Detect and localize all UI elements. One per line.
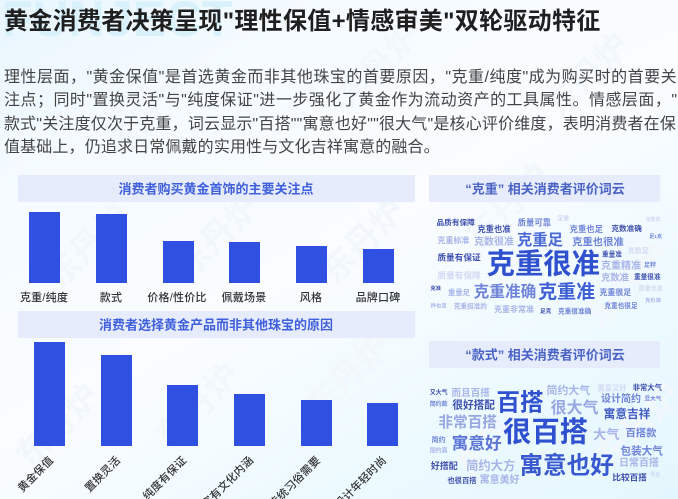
text: 东丹炉 [149, 357, 248, 456]
word cloud: style: 寓意美好 [480, 473, 520, 486]
text: 东丹炉 [39, 197, 138, 296]
word cloud: weight: 克数准 [601, 272, 630, 283]
word cloud: style: 简约大气 [546, 383, 590, 397]
word cloud: style: 寓意也好 [519, 451, 614, 479]
word cloud: style: 简约高 [430, 446, 448, 454]
word cloud: weight: 克重足 [517, 231, 563, 249]
panel: weight word cloud [429, 175, 663, 315]
word cloud: style: 很好搭配 [452, 398, 495, 411]
word cloud: style: 简约 [432, 435, 446, 444]
panel: main concerns bar chart [18, 175, 415, 304]
axis labels: main concerns: 佩戴场景 [222, 290, 266, 304]
axis labels: main concerns: 风格 [300, 290, 322, 304]
word cloud: style: 包装大气 [620, 444, 663, 457]
word cloud: style: 寓意又好 [597, 383, 627, 392]
word cloud: weight: 重量准 [602, 249, 622, 258]
text block: summary [4, 68, 678, 156]
word cloud: weight: 克重很准 [487, 249, 600, 281]
word cloud: weight: 克数准 [646, 216, 660, 223]
bar chart: main concerns [29, 212, 394, 283]
word cloud: weight: 秤也足 [431, 302, 447, 310]
text block: summary: 理性层面，"黄金保值"是首选黄金而非其他珠宝的首要原因，"克重/纯度"成为购买时的首要关 [4, 69, 677, 86]
word cloud: weight: 克价准 [645, 296, 662, 304]
word cloud: style: 大气 [593, 426, 620, 442]
word cloud: weight: 质量有保证 [437, 252, 481, 263]
text: 东丹炉 [9, 377, 108, 476]
word cloud: style: 寓意好 [452, 433, 502, 453]
text: 东丹炉 [459, 157, 558, 256]
word cloud: style [430, 383, 663, 486]
word cloud: weight: 克重也准 [477, 224, 511, 234]
word cloud: weight: 足1克 [649, 233, 662, 240]
word cloud: weight: 质量可靠 [518, 218, 551, 228]
word cloud: weight: 克重也很准 [572, 235, 624, 248]
word cloud: style: 日常百搭 [619, 456, 659, 469]
axis labels: main concerns: 价格/性价比 [147, 290, 207, 304]
word cloud: style: 百搭 [496, 389, 544, 416]
word cloud: style: 很且 [650, 471, 660, 478]
word cloud: style: 又大气 [430, 389, 448, 397]
word cloud: weight: 克重非常准 [494, 304, 534, 314]
axis labels: main concerns: 品牌口碑 [356, 290, 400, 304]
text: 东丹炉 [539, 27, 638, 126]
word cloud: weight: 克重挺准的 [454, 301, 487, 310]
text: 东丹炉 [314, 192, 413, 291]
heading: reasons: 消费者选择黄金产品而非其他珠宝的原因 [99, 318, 333, 332]
word cloud: weight: 质量也准 [639, 284, 663, 292]
word cloud: style: 也很百搭 [447, 476, 477, 485]
word cloud: style: 好搭配 [431, 460, 458, 471]
heading: style word cloud: “款式” 相关消费者评价词云 [465, 348, 625, 362]
text: 东丹炉 [169, 187, 268, 286]
text block: summary: 注点；同时"置换灵活"与"纯度保证"进一步强化了黄金作为流动资产的工具属性。情感层面，" [4, 92, 678, 109]
word cloud: weight: 克重也很足 [604, 301, 638, 310]
axis labels: main concerns [20, 290, 400, 304]
word cloud: weight: 克重很准确 [558, 306, 592, 315]
heading: style word cloud [429, 341, 660, 368]
word cloud: weight: 克数很准 [474, 235, 514, 248]
word cloud: weight: 重量很准 [634, 272, 661, 281]
word cloud: weight: 克重很足 [599, 287, 631, 297]
word cloud: style: 比较百搭 [612, 472, 647, 483]
axis labels: reasons: 置换灵活 [82, 453, 123, 495]
word cloud: style: 非常百搭 [438, 414, 497, 431]
heading: weight word cloud: “克重” 相关消费者评价词云 [465, 182, 625, 196]
word cloud: weight: 克重标准 [437, 235, 469, 245]
word cloud: weight: 克重精准 [601, 259, 641, 272]
word cloud: style: 百搭款 [625, 426, 657, 439]
word cloud: weight: 质量有保障 [437, 269, 481, 280]
text block: summary: 款式"关注度仅次于克重，词云显示"百搭""寓意也好""很大气"是核心评价维度，表明消费者在保 [4, 116, 676, 133]
word cloud: weight: 重量足 [448, 288, 471, 297]
text block: summary: 值基础上，仍追求日常佩戴的实用性与文化吉祥寓意的融合。 [4, 139, 440, 156]
heading: main concerns [18, 175, 415, 202]
word cloud: style: 寓意吉祥 [604, 407, 651, 421]
axis labels: reasons: 黄金保值 [15, 453, 56, 495]
word cloud: style: 很百搭 [503, 417, 588, 449]
word cloud: style: 简约款 [430, 400, 448, 408]
text: 东丹炉 [449, 387, 548, 486]
text: 东丹炉 [299, 327, 398, 426]
word cloud: style: 显大气 [644, 394, 662, 402]
word cloud: weight [430, 215, 663, 315]
panel: style word cloud [429, 341, 663, 486]
word cloud: weight: 克重准 [538, 281, 595, 303]
bar chart: reasons [34, 342, 398, 446]
word cloud: style: 简约大方 [466, 458, 515, 473]
axis labels: reasons [15, 453, 389, 499]
word cloud: style: 非常大气 [633, 383, 663, 392]
word cloud: weight: 克数足 [628, 246, 649, 255]
axis labels: main concerns: 克重/纯度 [20, 290, 68, 304]
word cloud: weight: 克准 [430, 284, 442, 292]
word cloud: weight: 品质有保障 [437, 217, 475, 227]
axis labels: main concerns: 款式 [100, 290, 122, 304]
panel: reasons bar chart [15, 311, 415, 499]
word cloud: weight: 克重也足 [570, 224, 604, 234]
word cloud: style: 而且百搭 [451, 387, 490, 399]
heading: reasons [18, 311, 415, 338]
word cloud: style: 设计简约 [601, 392, 641, 405]
text: 东丹炉 [579, 237, 678, 336]
word cloud: weight: 足秤 [644, 261, 656, 269]
word cloud: weight: 克数准确 [611, 223, 642, 233]
title: 黄金消费者决策呈现"理性保值+情感审美"双轮驱动特征 [4, 8, 601, 35]
text: 东丹炉 [99, 67, 198, 166]
word cloud: weight: 足重 [557, 215, 569, 223]
heading: main concerns: 消费者购买黄金首饰的主要关注点 [118, 182, 314, 196]
word cloud: weight: 克重准确 [474, 282, 536, 301]
word cloud: weight: 足克 [540, 307, 552, 315]
heading: weight word cloud [429, 175, 660, 202]
text: 东丹炉 [329, 17, 428, 116]
word cloud: style: 很大气 [551, 399, 599, 417]
